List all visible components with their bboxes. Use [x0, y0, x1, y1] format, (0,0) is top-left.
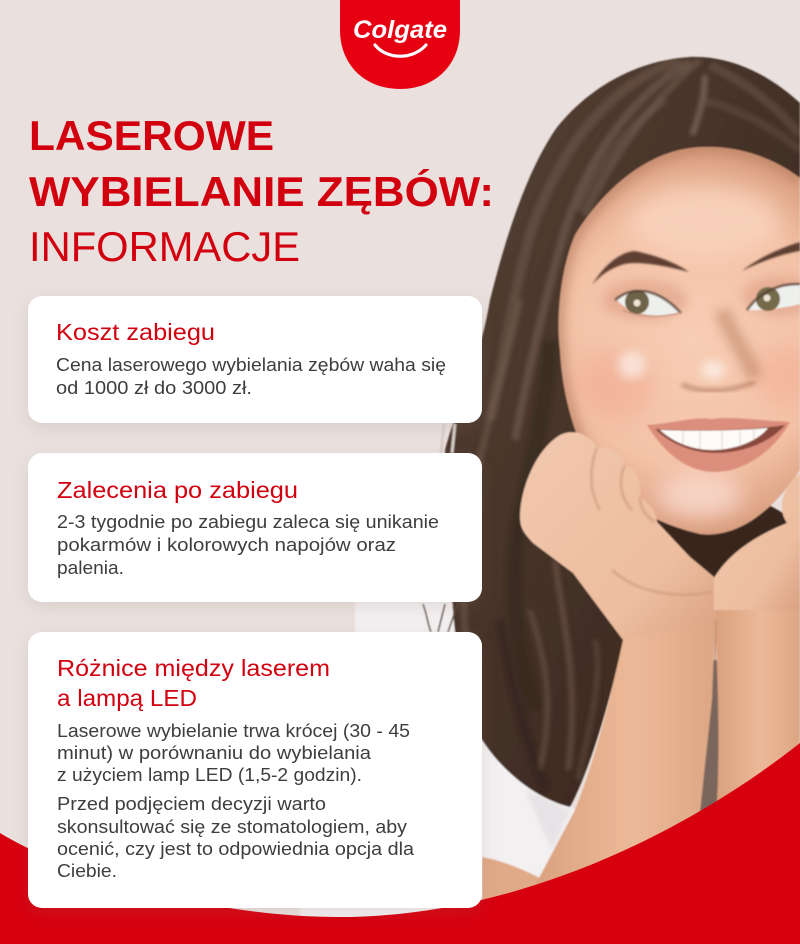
red wave at the bottom — [0, 743, 800, 944]
text: czas zabiegu: z użyciem lamp LED (1,5-2 godzin). — [57, 765, 362, 785]
text: koszt: Cena laserowego wybielania zębów waha się — [56, 355, 446, 375]
dark shadow under chin — [650, 500, 792, 592]
left eyebrow — [592, 251, 689, 285]
hair strands between cards — [441, 424, 455, 453]
text: konsultacja: Przed podjęciem decyzji warto — [57, 794, 326, 814]
title — [29, 112, 494, 270]
text: koszt — [56, 355, 446, 398]
title: WYBIELANIE ZĘBÓW: — [29, 167, 494, 215]
heading: różnice: Różnice między laserem — [57, 655, 330, 681]
text: czas zabiegu: Laserowe wybielanie trwa krócej (30 - 45 — [57, 721, 410, 741]
logo wordmark: Colgate — [353, 16, 447, 44]
text: zalecenia: palenia. — [57, 558, 124, 578]
right hand — [714, 473, 800, 610]
text: zalecenia: pokarmów i kolorowych napojów oraz — [57, 535, 396, 555]
heading: koszt: Koszt zabiegu — [56, 319, 215, 345]
nose shading — [722, 310, 755, 378]
panel: koszt zabiegu — [28, 296, 482, 423]
title: LASEROWE — [29, 112, 274, 159]
text: konsultacja — [57, 794, 415, 881]
cheek highlight — [618, 351, 646, 379]
logo smile — [375, 45, 426, 56]
photo: smiling woman — [300, 57, 800, 918]
heading: zalecenia: Zalecenia po zabiegu — [57, 477, 298, 503]
text: konsultacja: skonsultować się ze stomatologiem, aby — [57, 817, 407, 837]
left hand — [520, 432, 717, 640]
text: czas zabiegu — [57, 721, 410, 785]
right eye — [747, 284, 800, 311]
text: konsultacja: ocenić, czy jest to odpowiednia opcja dla — [57, 839, 415, 859]
chin light — [658, 473, 742, 517]
text: czas zabiegu: minut) w porównaniu do wybielania — [57, 743, 372, 763]
hairline shadow — [558, 147, 800, 465]
text: koszt: od 1000 zł do 3000 zł. — [56, 378, 252, 398]
panel: zalecenia po zabiegu — [28, 453, 482, 602]
face — [558, 147, 800, 534]
forehead light — [630, 186, 780, 258]
text: zalecenia: 2-3 tygodnie po zabiegu zaleca się unikanie — [57, 512, 439, 532]
text: zalecenia — [57, 512, 439, 578]
arms — [530, 600, 800, 895]
eye socket tint — [603, 280, 687, 320]
heading: różnice: a lampą LED — [57, 685, 197, 711]
left eye — [615, 290, 681, 316]
dark hair — [423, 57, 800, 807]
panel: różnice między laserem a lampą LED — [28, 632, 482, 908]
right eyebrow — [742, 242, 800, 271]
text: konsultacja: Ciebie. — [57, 861, 117, 881]
logo badge — [340, 0, 460, 89]
white t-shirt — [300, 602, 575, 918]
cheek colour — [580, 355, 654, 415]
smile — [647, 418, 790, 472]
heading: różnice — [57, 655, 330, 711]
title: INFORMACJE — [29, 223, 300, 270]
